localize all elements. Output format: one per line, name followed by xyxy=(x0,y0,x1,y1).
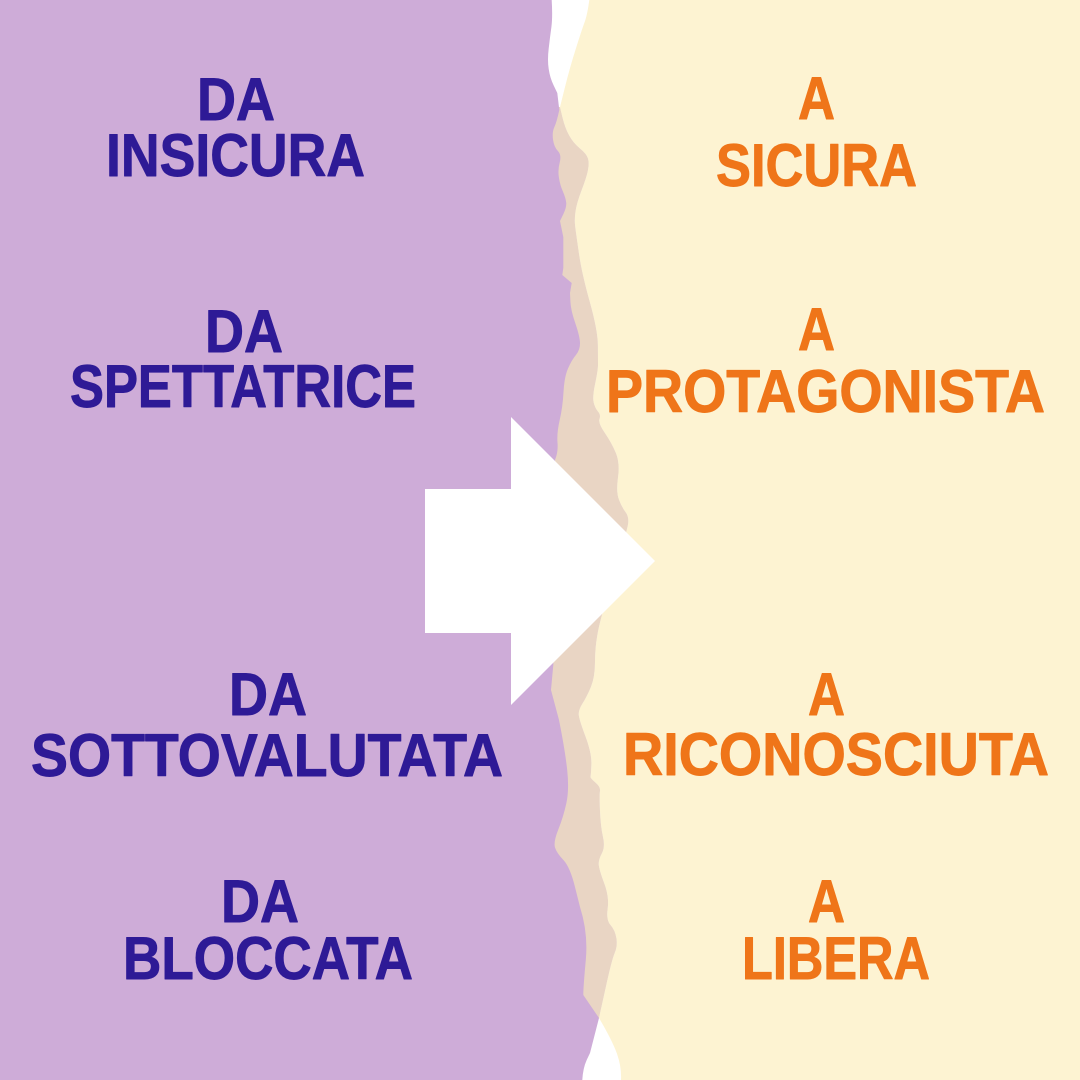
text: a libera: LIBERA xyxy=(742,925,930,992)
text: da sottovalutata: SOTTOVALUTATA xyxy=(31,722,503,789)
panel: cream right torn paper xyxy=(560,0,1080,1080)
text: da spettatrice: DA xyxy=(205,298,283,365)
text: a riconosciuta: RICONOSCIUTA xyxy=(623,721,1049,788)
text: da spettatrice: SPETTATRICE xyxy=(70,353,416,420)
torn paper overlap band xyxy=(500,107,628,1018)
text: a riconosciuta: A xyxy=(808,661,845,728)
text: da bloccata: DA xyxy=(221,868,299,935)
text: da insicura xyxy=(106,66,365,189)
text: da bloccata xyxy=(123,868,413,992)
text: a protagonista: A xyxy=(798,296,835,363)
text: a sicura xyxy=(716,65,917,199)
text: a libera xyxy=(742,868,930,992)
text: da bloccata: BLOCCATA xyxy=(123,925,413,992)
text: da sottovalutata xyxy=(31,661,503,789)
text: a riconosciuta xyxy=(623,661,1049,788)
text: a protagonista: PROTAGONISTA xyxy=(606,358,1045,425)
text: da spettatrice xyxy=(70,298,416,420)
text: da insicura: DA xyxy=(197,66,275,133)
text: da insicura: INSICURA xyxy=(106,122,365,189)
arrow: white pointing right xyxy=(425,417,655,705)
text: a protagonista xyxy=(606,296,1045,425)
text: da sottovalutata: DA xyxy=(229,661,307,728)
panel: purple left torn paper xyxy=(0,0,599,1080)
text: a sicura: A xyxy=(798,65,835,132)
text: a sicura: SICURA xyxy=(716,132,917,199)
text: a libera: A xyxy=(808,868,845,935)
